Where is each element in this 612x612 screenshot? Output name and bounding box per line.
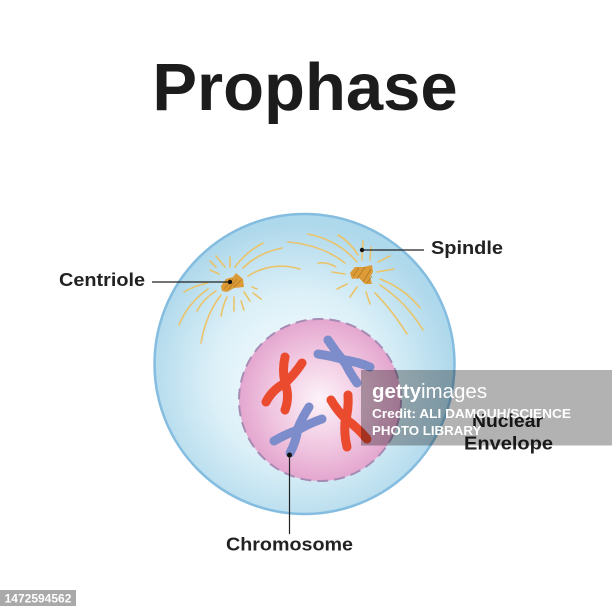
watermark text: Credit: ALI DAMOUH/SCIENCE xyxy=(372,406,571,421)
label: Nuclear Envelope xyxy=(464,411,553,454)
label: Centriole xyxy=(59,270,232,290)
chromosome: blue bottom xyxy=(274,407,322,453)
label: Spindle: Spindle xyxy=(431,238,503,258)
chromosome: red left xyxy=(266,357,302,410)
cell diagram xyxy=(154,214,454,514)
watermark text xyxy=(372,380,571,438)
label: Chromosome xyxy=(226,452,353,554)
spindle fibers: left xyxy=(179,243,300,343)
label: Spindle xyxy=(360,238,503,258)
centriole: left xyxy=(221,273,244,292)
centriole: right xyxy=(350,265,373,284)
image id tag: 1472594562 xyxy=(5,592,72,606)
chromosome: red right xyxy=(331,395,367,447)
watermark band xyxy=(361,370,612,446)
label: Chromosome: Chromosome xyxy=(226,534,353,554)
cell membrane xyxy=(154,214,454,514)
nucleus with dashed envelope xyxy=(239,319,401,481)
watermark text: PHOTO LIBRARY xyxy=(372,423,481,438)
label: Nuclear Envelope: Envelope xyxy=(464,434,553,454)
watermark text: gettyimages xyxy=(372,380,487,403)
label: Nuclear Envelope: Nuclear xyxy=(472,411,543,431)
label: Centriole: Centriole xyxy=(59,270,145,290)
title: Prophase xyxy=(152,50,458,125)
spindle fibers: right xyxy=(288,234,423,334)
chromosome: blue top xyxy=(318,340,370,383)
